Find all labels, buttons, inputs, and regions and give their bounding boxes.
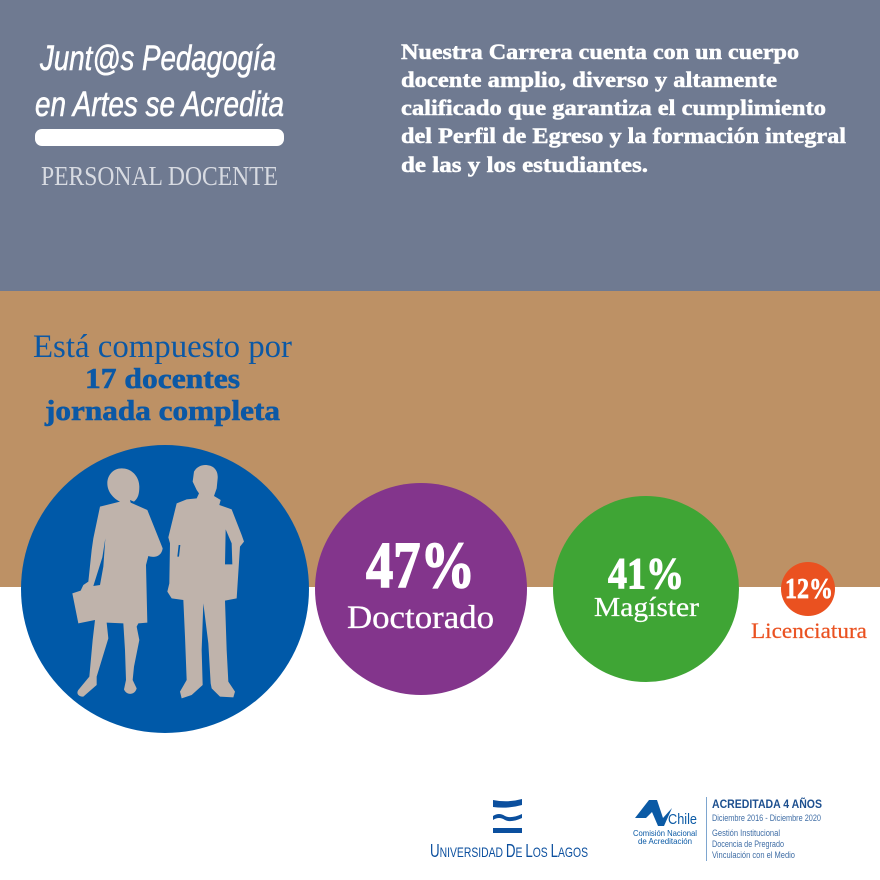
intro paragraph: calificado que garantiza el cumplimiento	[401, 95, 826, 120]
accreditation areas: Gestión Institucional	[712, 828, 780, 838]
intro paragraph: de las y los estudiantes.	[401, 152, 648, 177]
logo word Chile: Chile	[668, 811, 697, 828]
logo wordmark: UNIVERSIDAD DE LOS LAGOS	[430, 841, 588, 861]
icon: teachers silhouettes	[72, 465, 244, 698]
stat: 12%: 12%	[785, 574, 833, 605]
heading: composition	[33, 329, 292, 427]
intro paragraph: del Perfil de Egreso y la formación integral	[401, 123, 846, 148]
accreditation dates: Diciembre 2016 - Diciembre 2020	[712, 813, 821, 823]
accreditation heading: ACREDITADA 4 AÑOS	[712, 796, 822, 811]
accreditation details	[712, 796, 822, 860]
accreditation details: Docencia de Pregrado	[712, 839, 784, 849]
green circle: magister	[553, 496, 739, 682]
intro paragraph: docente amplio, diverso y altamente	[401, 67, 777, 92]
logo: CNA Chile: de Acreditación	[638, 836, 692, 846]
icon: man	[167, 465, 244, 698]
label: Magister: Magíster	[594, 592, 699, 622]
panel: tan background band	[0, 291, 880, 587]
title block	[35, 39, 284, 191]
blue circle with silhouettes	[21, 445, 309, 733]
label: Doctorado: Doctorado	[347, 600, 494, 636]
title line 2: en Artes se Acredita	[35, 85, 284, 124]
icon: woman	[72, 468, 163, 697]
logo: Universidad de Los Lagos	[430, 799, 588, 861]
intro paragraph	[401, 39, 846, 177]
orange circle: licenciatura	[751, 562, 867, 643]
intro paragraph: Nuestra Carrera cuenta con un cuerpo	[401, 39, 799, 64]
accreditation details: Vinculación con el Medio	[712, 850, 795, 860]
title line 1: Junt@s Pedagogía	[39, 39, 276, 78]
heading count: 17 docentes	[85, 363, 240, 395]
heading role: jornada completa	[44, 395, 281, 427]
logo: CNA Chile	[633, 800, 697, 846]
subtitle: PERSONAL DOCENTE	[41, 161, 278, 191]
purple circle: doctorado	[315, 483, 527, 695]
panel: header background	[0, 0, 880, 291]
heading light line: Está compuesto por	[33, 329, 292, 365]
stat: 41%: 41%	[608, 549, 684, 598]
title underline bar	[35, 129, 284, 146]
stat: 47%: 47%	[366, 529, 475, 602]
logo agency name: Comisión Nacional	[633, 828, 697, 838]
label: Licenciatura: Licenciatura	[751, 618, 867, 643]
